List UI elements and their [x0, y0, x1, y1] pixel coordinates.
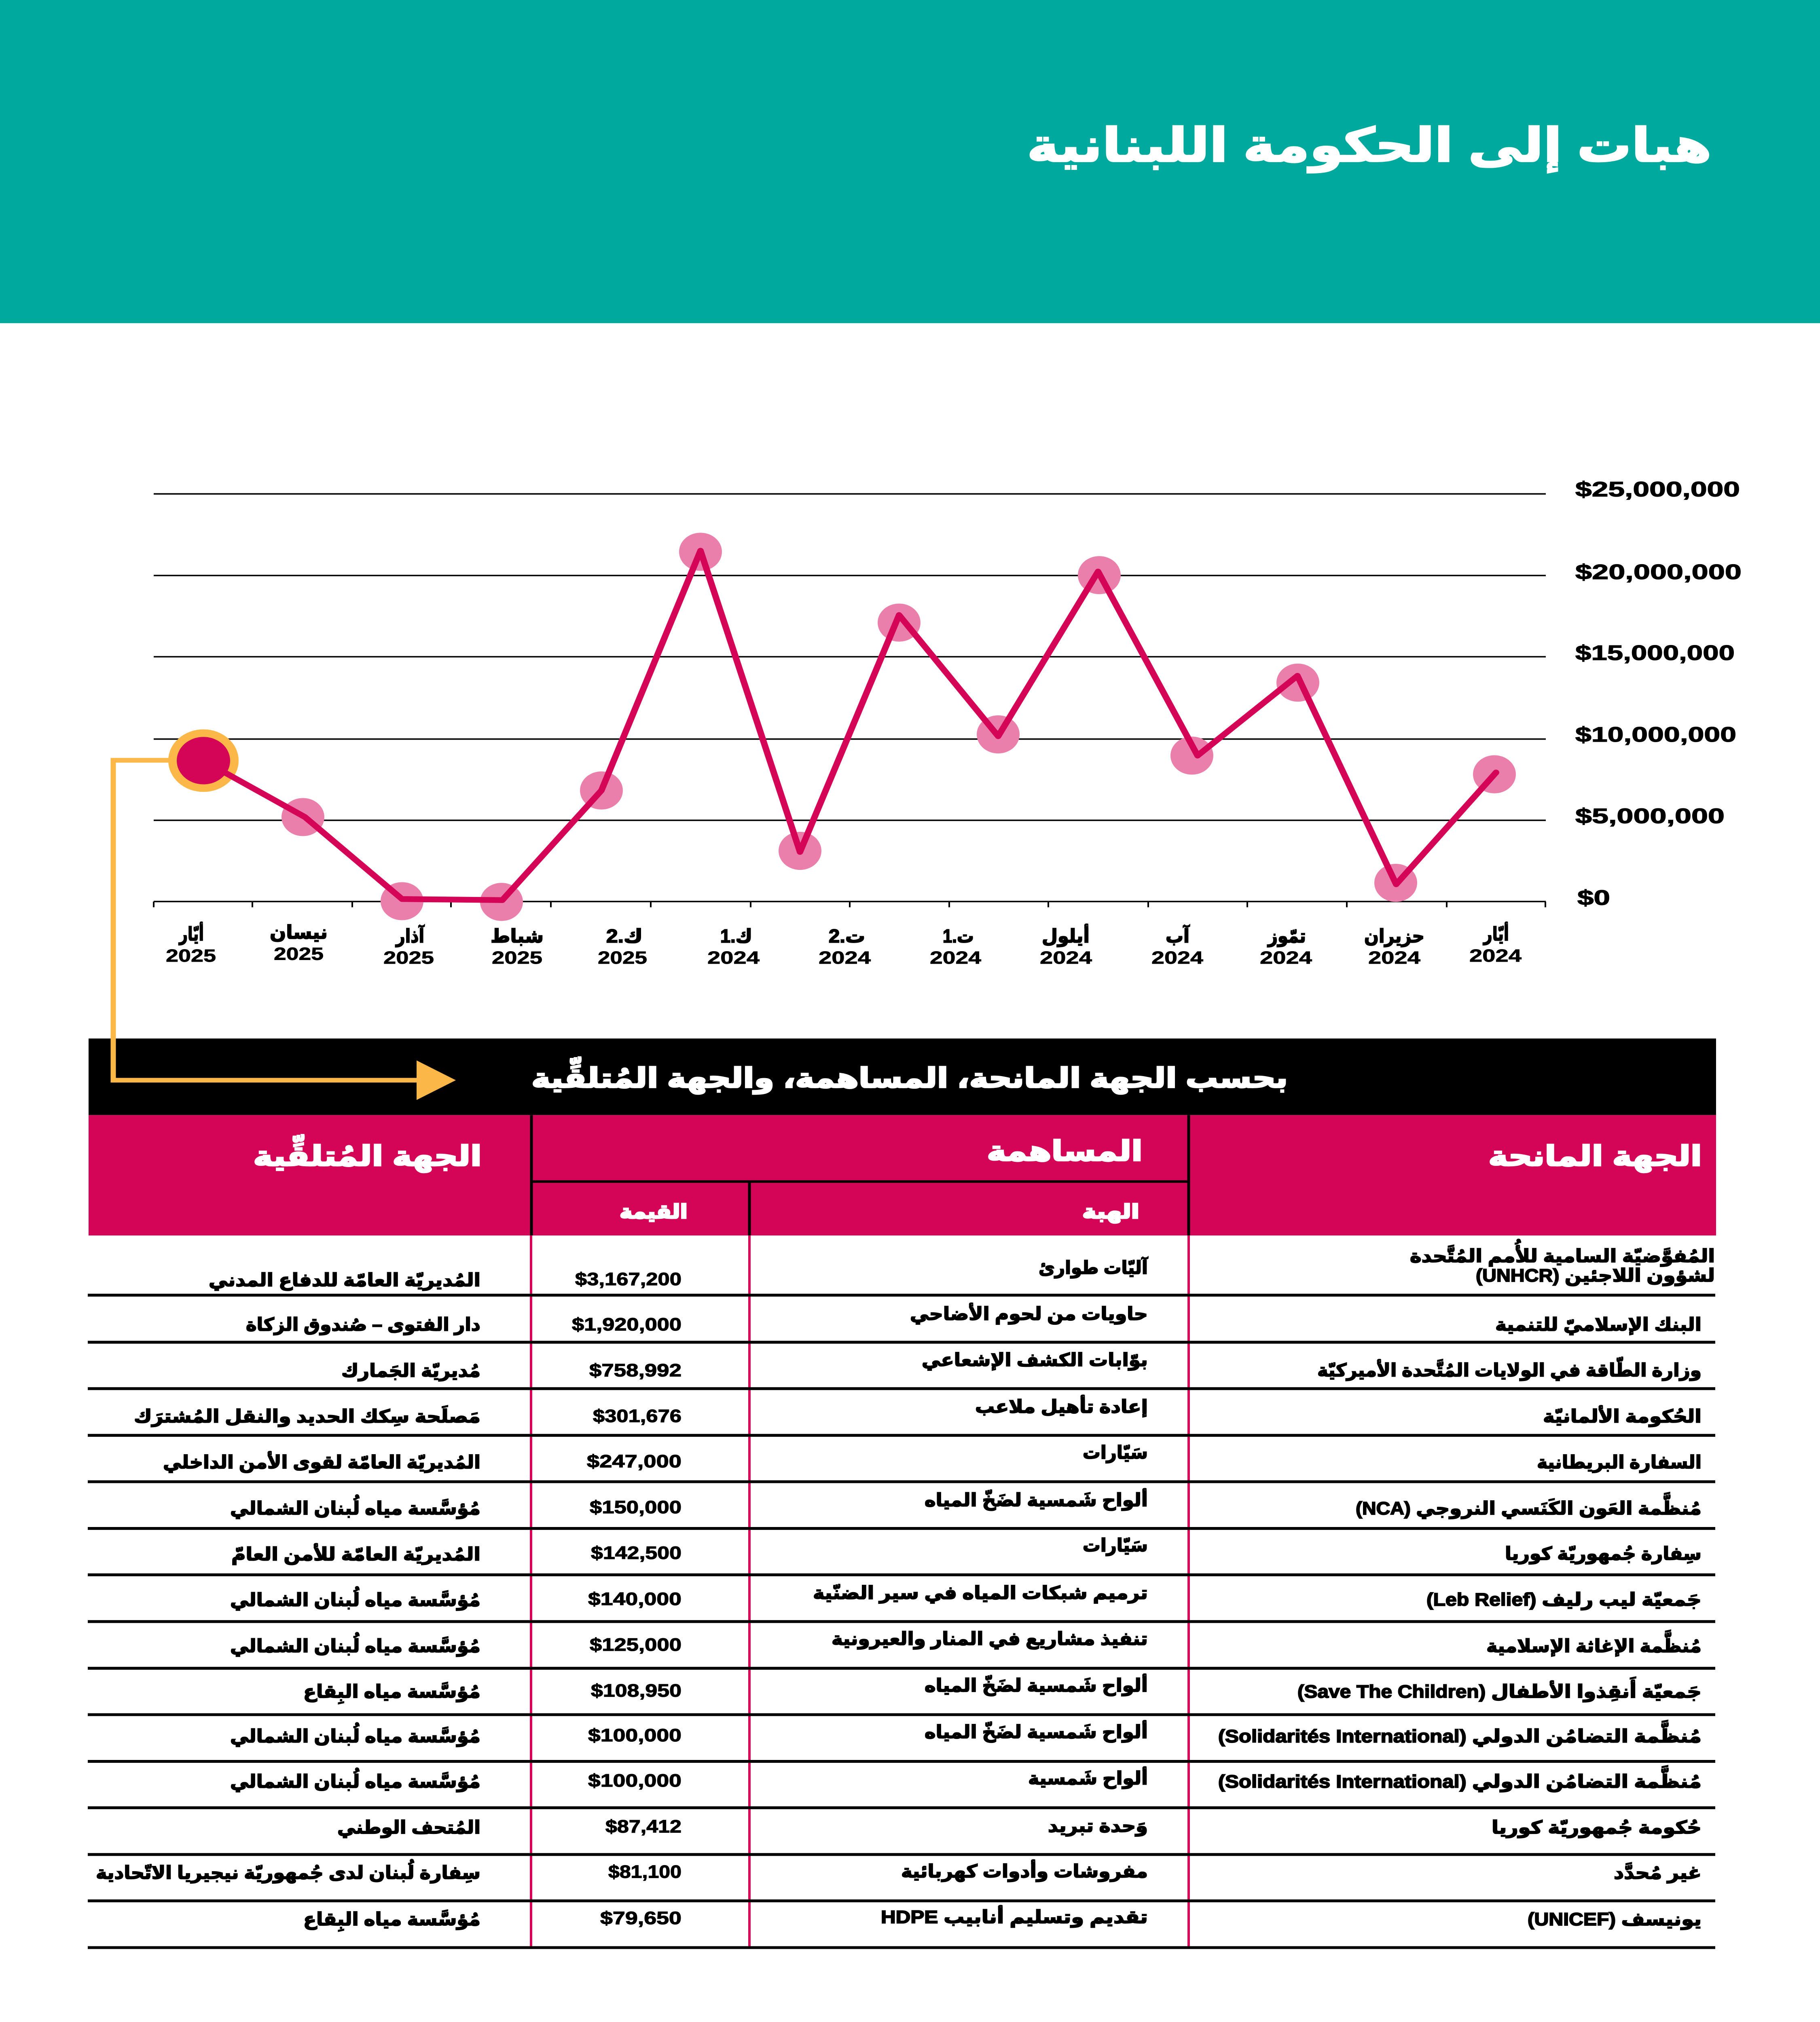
- x axis labels: أيّار: [1483, 922, 1509, 945]
- table row 15: تقديم وتسليم أنابيب HDPE: [881, 1905, 1148, 1928]
- table row 7: سَيّارات: [1083, 1536, 1148, 1556]
- table header: [89, 1115, 1716, 1235]
- chart grid lines: [154, 494, 1546, 907]
- table row 1: آليّات طوارئ: [1039, 1256, 1149, 1278]
- table row 7: المُديريّة العامّة للأمن العامّ: [231, 1543, 480, 1565]
- table row 2: $1,920,000: [572, 1314, 681, 1335]
- table row 3: بوّابات الكشف الإشعاعي: [922, 1350, 1148, 1371]
- table row 5: $247,000: [587, 1451, 681, 1472]
- x axis labels: 2024: [1368, 948, 1420, 968]
- table row 1: المُديريّة العامّة للدفاع المدني: [209, 1270, 480, 1291]
- table row 15: يونيسف (UNICEF): [1528, 1909, 1701, 1930]
- x axis labels: أيّار: [178, 922, 204, 945]
- x axis labels: ك.2: [606, 926, 643, 947]
- x axis labels: ت.1: [943, 926, 974, 947]
- table row 10: مُؤسَّسة مياه البِقاع: [303, 1682, 480, 1704]
- table row 9: [230, 1629, 1701, 1657]
- x axis labels: 2024: [1151, 948, 1203, 968]
- y axis labels: [1575, 478, 1742, 909]
- table row 6: ألواح شَمسية لضَخّ المياه: [925, 1488, 1148, 1511]
- table row 4: $301,676: [593, 1406, 681, 1426]
- table row 3: $758,992: [589, 1360, 681, 1381]
- table row 1: $3,167,200: [575, 1269, 681, 1289]
- table row 5: سَيّارات: [1083, 1443, 1148, 1463]
- table row 4: مَصلَحة سِكك الحديد والنقل المُشترَك: [134, 1405, 480, 1427]
- table row 15: [303, 1905, 1701, 1932]
- table row 12: ألواح شَمسية: [1028, 1766, 1148, 1789]
- x axis labels: 2024: [819, 948, 871, 968]
- x axis labels: 2025: [166, 945, 216, 965]
- table row 13: المُتحف الوطني: [337, 1818, 480, 1838]
- table band heading: بحسب الجهة المانحة، المساهمة، والجهة المُتلقِّية: [531, 1057, 1288, 1094]
- table row 9: $125,000: [590, 1635, 681, 1655]
- table row 11: ألواح شَمسية لضَخّ المياه: [925, 1720, 1148, 1743]
- table row 7: سِفارة جُمهوريّة كوريا: [1505, 1544, 1701, 1564]
- x axis labels: شباط: [491, 926, 544, 947]
- table column dividers: [531, 1235, 1189, 1948]
- table row 12: مُؤسَّسة مياه لُبنان الشمالي: [230, 1768, 480, 1792]
- table row 7: $142,500: [591, 1543, 681, 1563]
- table row 14: غير مُحدَّد: [1614, 1862, 1701, 1883]
- line chart: [154, 478, 1742, 968]
- table row 11: مُؤسَّسة مياه لُبنان الشمالي: [230, 1722, 480, 1747]
- table row 10: ألواح شَمسية لضَخّ المياه: [925, 1674, 1148, 1696]
- table row 14: [96, 1859, 1701, 1883]
- x axis labels: آذار: [395, 925, 425, 947]
- header: value: القيمة: [620, 1201, 688, 1223]
- table row 11: $100,000: [588, 1725, 681, 1745]
- x axis labels: 2024: [707, 948, 760, 968]
- table row 8: $140,000: [588, 1589, 681, 1609]
- table row 1: المُفوَّضيّة السامية للأُمم المُتَّحدة: [1410, 1239, 1715, 1267]
- table row 11: مُنظَّمة التضامُن الدولي (Solidarités International): [1218, 1720, 1701, 1747]
- table row 4: الحُكومة الألمانيّة: [1543, 1405, 1701, 1427]
- x axis labels: حزيران: [1364, 926, 1424, 947]
- x axis labels: 2025: [598, 948, 647, 968]
- header: donation: الهبة: [1082, 1201, 1139, 1223]
- header banner: [0, 0, 1820, 323]
- x axis labels: أيلول: [1042, 924, 1090, 947]
- table row 14: مفروشات وأدوات كهربائية: [901, 1860, 1148, 1882]
- table row 8: [230, 1583, 1701, 1611]
- header: recipient: الجهة المُتلقِّية: [253, 1135, 482, 1173]
- y axis labels: $25,000,000: [1575, 478, 1740, 501]
- table row 5: المُديريّة العامّة لقوى الأمن الداخلي: [163, 1451, 480, 1473]
- table row 12: [230, 1766, 1701, 1792]
- table row 8: مُؤسَّسة مياه لُبنان الشمالي: [230, 1586, 480, 1611]
- table row 8: ترميم شبكات المياه في سير الضنّية: [813, 1583, 1148, 1603]
- x axis labels: 2025: [274, 944, 324, 964]
- table row 10: جَمعيّة أَنقِذوا الأطفال (Save The Children): [1297, 1677, 1701, 1702]
- highlighted point May 2025: [168, 730, 239, 792]
- x axis labels: 2024: [1260, 948, 1312, 968]
- x axis labels: 2025: [383, 948, 434, 968]
- table row 6: مُؤسَّسة مياه لُبنان الشمالي: [230, 1495, 480, 1519]
- table row 9: تنفيذ مشاريع في المنار والعيرونية: [832, 1629, 1148, 1650]
- table row 4: [134, 1395, 1701, 1427]
- x axis labels: 2025: [492, 948, 542, 968]
- table row 10: $108,950: [591, 1681, 681, 1701]
- table row 3: وزارة الطّاقة في الولايات المُتَّحدة الأميركيّة: [1317, 1357, 1701, 1381]
- table row 15: $79,650: [600, 1908, 681, 1929]
- x axis labels: تمّوز: [1267, 926, 1306, 947]
- y axis labels: $5,000,000: [1575, 804, 1725, 828]
- y axis labels: $0: [1577, 886, 1610, 909]
- table band: [89, 1038, 1716, 1115]
- table row 12: $100,000: [588, 1770, 681, 1791]
- table row 9: مُؤسَّسة مياه لُبنان الشمالي: [230, 1632, 480, 1657]
- table row 9: مُنظَّمة الإغاثة الإسلامية: [1486, 1630, 1701, 1656]
- table row 6: [230, 1488, 1701, 1519]
- x axis labels: ك.1: [720, 926, 752, 947]
- x axis labels: ت.2: [829, 926, 865, 947]
- table row 13: $87,412: [605, 1817, 681, 1837]
- table row 6: $150,000: [590, 1497, 681, 1518]
- title: هبات إلى الحكومة اللبنانية: [1027, 120, 1712, 173]
- table row 2: [246, 1303, 1701, 1335]
- x axis labels: 2024: [1469, 945, 1522, 965]
- x axis labels: [166, 922, 1522, 968]
- data line: [203, 551, 1496, 900]
- table row 2: حاويات من لحوم الأضاحي: [910, 1303, 1148, 1324]
- data point markers: [281, 533, 1516, 921]
- table row 7: [231, 1536, 1701, 1565]
- table row 14: سِفارة لُبنان لدى جُمهوريّة نيجيريا الاتّحادية: [96, 1859, 480, 1883]
- table row 4: إعادة تأهيل ملاعب: [975, 1395, 1148, 1417]
- table row 13: وَحدة تبريد: [1048, 1816, 1148, 1836]
- x axis labels: 2024: [930, 948, 981, 968]
- x axis labels: آب: [1166, 925, 1190, 947]
- table row 3: مُديريّة الجَمارك: [341, 1361, 480, 1381]
- x axis labels: 2024: [1040, 948, 1092, 968]
- table row 13: حُكومة جُمهوريّة كوريا: [1492, 1818, 1701, 1838]
- x axis labels: نيسان: [270, 922, 328, 943]
- header: donor: الجهة المانحة: [1488, 1140, 1702, 1173]
- table row 2: دار الفتوى – صُندوق الزكاة: [246, 1315, 480, 1335]
- table row 6: مُنظَّمة العَون الكَنَسي النروجي (NCA): [1356, 1492, 1701, 1519]
- header: contribution: المساهمة: [987, 1135, 1143, 1167]
- table row 3: [341, 1350, 1701, 1381]
- table row 5: [163, 1443, 1701, 1473]
- table row 12: مُنظَّمة التضامُن الدولي (Solidarités International): [1218, 1766, 1701, 1792]
- y axis labels: $20,000,000: [1575, 560, 1742, 584]
- table row 13: [337, 1816, 1701, 1838]
- table row 1: لشؤون اللاجئين (UNHCR): [1476, 1265, 1715, 1286]
- table row 5: السفارة البريطانية: [1537, 1453, 1701, 1473]
- y axis labels: $15,000,000: [1575, 641, 1735, 664]
- arrow: highlighted point to table: [113, 760, 456, 1100]
- table row 11: [230, 1720, 1701, 1747]
- table row 15: مُؤسَّسة مياه البِقاع: [303, 1909, 480, 1932]
- table row 10: [303, 1674, 1701, 1704]
- table row 2: البنك الإسلاميّ للتنمية: [1495, 1315, 1701, 1335]
- table row 1: [209, 1239, 1715, 1291]
- table row 8: جَمعيّة ليب رليف (Leb Relief): [1426, 1590, 1701, 1610]
- table row rules: [88, 1295, 1715, 1948]
- table row 14: $81,100: [608, 1862, 681, 1882]
- y axis labels: $10,000,000: [1575, 723, 1736, 746]
